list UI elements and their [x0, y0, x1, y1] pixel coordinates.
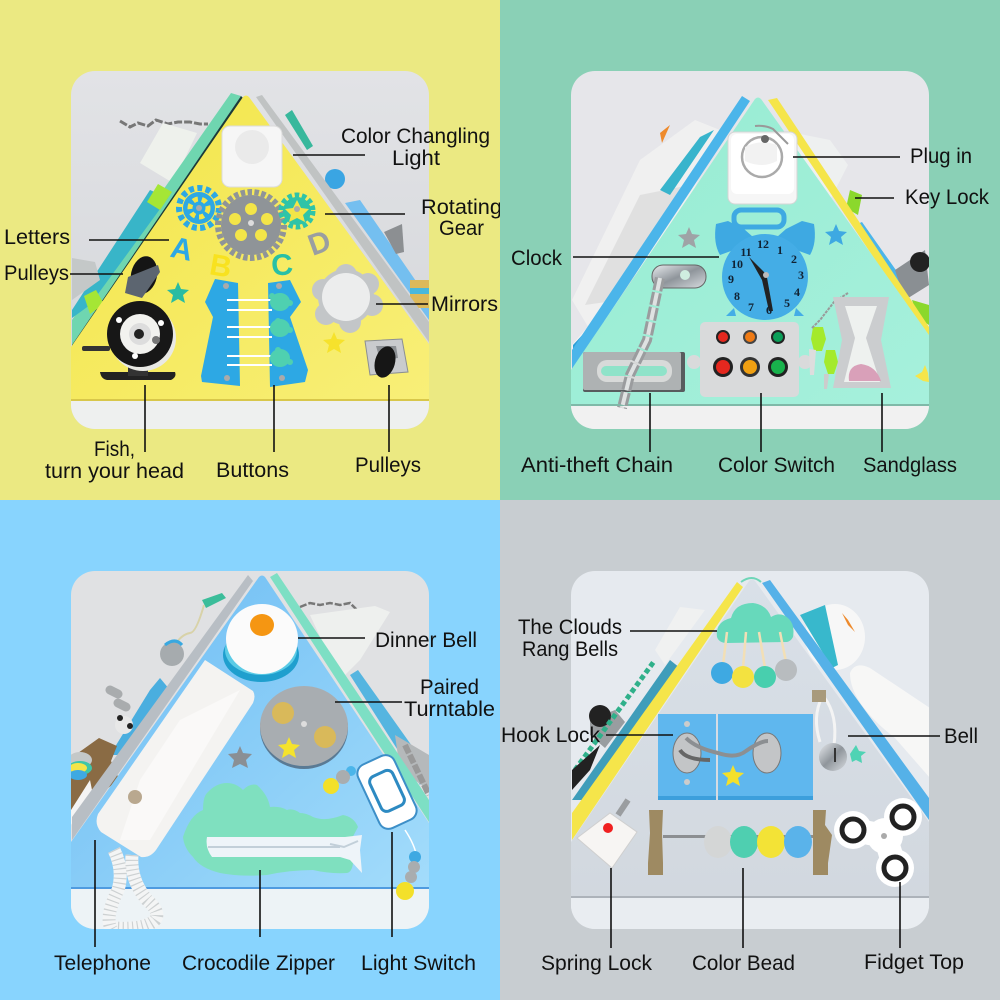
icon: grey gear: [218, 192, 284, 258]
letter blocks: D: [304, 224, 335, 263]
callouts: mint side: Color Switch: [718, 454, 835, 477]
yellow triangle face: [71, 96, 429, 400]
icon: color changing light: [222, 126, 282, 187]
icon: alarm clock: 5: [784, 296, 790, 310]
icon: alarm clock: 4: [794, 285, 800, 299]
letter blocks: B: [207, 248, 234, 285]
icon: light switch: [323, 752, 421, 900]
icons: small stars: [678, 224, 929, 382]
callouts: blue side: Light Switch: [361, 952, 476, 975]
callouts: yellow side: Pulleys: [355, 454, 421, 477]
callouts: mint side: Clock: [511, 247, 562, 270]
icon: dinner bell: [223, 604, 299, 682]
icon: pulley caster: [125, 254, 161, 298]
icon: alarm clock: 1: [777, 243, 783, 257]
callouts: yellow side: Fish,: [94, 438, 135, 461]
callouts: mint side: Key Lock: [905, 186, 989, 209]
icon: paired turntable: [260, 686, 348, 769]
callouts: grey side: Hook Lock: [501, 724, 600, 747]
callouts: blue side: [54, 629, 495, 975]
icon: button dress: [201, 279, 308, 387]
icon: alarm clock: 3: [798, 268, 804, 282]
callouts: mint side: Plug in: [910, 145, 972, 168]
icon: sandglass: [833, 297, 891, 388]
icon: alarm clock: 9: [728, 272, 734, 286]
icon: keys: [809, 293, 848, 389]
photo: blue board: [68, 571, 429, 930]
callouts: yellow side: [4, 125, 502, 483]
icon: telephone handset: [97, 660, 254, 857]
callouts: yellow side: Light: [392, 147, 440, 170]
icon: blue gear: [179, 188, 219, 228]
callouts: grey side: The Clouds: [518, 616, 622, 639]
callouts: blue side: Paired: [420, 676, 479, 699]
callouts: yellow side: Mirrors: [431, 293, 498, 316]
icon: bell: [812, 690, 866, 771]
callouts: blue side: Crocodile Zipper: [182, 952, 335, 975]
callouts: grey side: Bell: [944, 725, 978, 748]
callouts: mint side: Sandglass: [863, 454, 957, 477]
icon: hook lock: [658, 714, 813, 800]
callouts: yellow side: Buttons: [216, 459, 289, 482]
icon: spring lock: [577, 800, 637, 868]
callouts: yellow side: Color Changling: [341, 125, 490, 148]
letter blocks: [170, 232, 329, 276]
callouts: yellow side: Rotating: [421, 196, 502, 219]
callouts: blue side: Turntable: [404, 698, 495, 721]
photo: grey board: [571, 571, 930, 929]
callouts: grey side: [501, 616, 978, 975]
mint triangle face: [571, 98, 929, 405]
callouts: yellow side: Letters: [4, 226, 70, 249]
callouts: mint side: [511, 145, 989, 477]
icon: teal star: [167, 282, 189, 303]
icon: swivel caster: [365, 339, 408, 380]
icon: flower mirror: [312, 264, 383, 333]
icon: fishing reel: [82, 301, 176, 380]
icon: fidget spinner: [834, 798, 922, 887]
callouts: mint side: Anti-theft Chain: [521, 454, 673, 477]
icon: alarm clock: 8: [734, 289, 740, 303]
letter blocks: C: [270, 248, 294, 283]
callouts: yellow side: Pulleys: [4, 262, 69, 285]
icon: color switch box: [687, 322, 812, 397]
icon: crocodile zipper: [183, 783, 362, 876]
photo: mint board: [571, 71, 930, 429]
icon: alarm clock: [715, 210, 815, 320]
icon: coiled cord: [109, 850, 157, 930]
icon: alarm clock: 2: [791, 252, 797, 266]
icon: plug socket: [728, 126, 797, 204]
icon: anti-theft chain: [583, 265, 706, 408]
panel: grey side: [500, 500, 1000, 1000]
letter blocks: A: [168, 231, 196, 268]
callouts: yellow side: turn your head: [45, 460, 184, 483]
icon: cloud bells: [711, 603, 797, 688]
panel: yellow side: [0, 0, 502, 500]
icon: grey star: [228, 746, 252, 768]
icon: alarm clock: 10: [731, 257, 743, 271]
icon: alarm clock: 7: [748, 300, 754, 314]
grey triangle face: [571, 580, 929, 897]
panel: mint side: [500, 0, 1000, 500]
icon: alarm clock: 6: [766, 303, 772, 317]
panel: blue side: [0, 500, 500, 1000]
callouts: grey side: Fidget Top: [864, 951, 964, 974]
callouts: yellow side: Gear: [439, 217, 484, 240]
blue triangle face: [71, 576, 429, 888]
icon: color bead rail: [648, 810, 832, 875]
icon: alarm clock: 11: [740, 245, 752, 259]
callouts: grey side: Spring Lock: [541, 952, 652, 975]
callouts: grey side: Color Bead: [692, 952, 795, 975]
photo: yellow board: [71, 71, 429, 429]
icon: yellow star: [323, 332, 345, 353]
callouts: blue side: Dinner Bell: [375, 629, 477, 652]
icon: mint gear: [281, 195, 313, 227]
icon: alarm clock: 12: [757, 237, 769, 251]
callouts: grey side: Rang Bells: [522, 638, 618, 661]
callouts: blue side: Telephone: [54, 952, 151, 975]
